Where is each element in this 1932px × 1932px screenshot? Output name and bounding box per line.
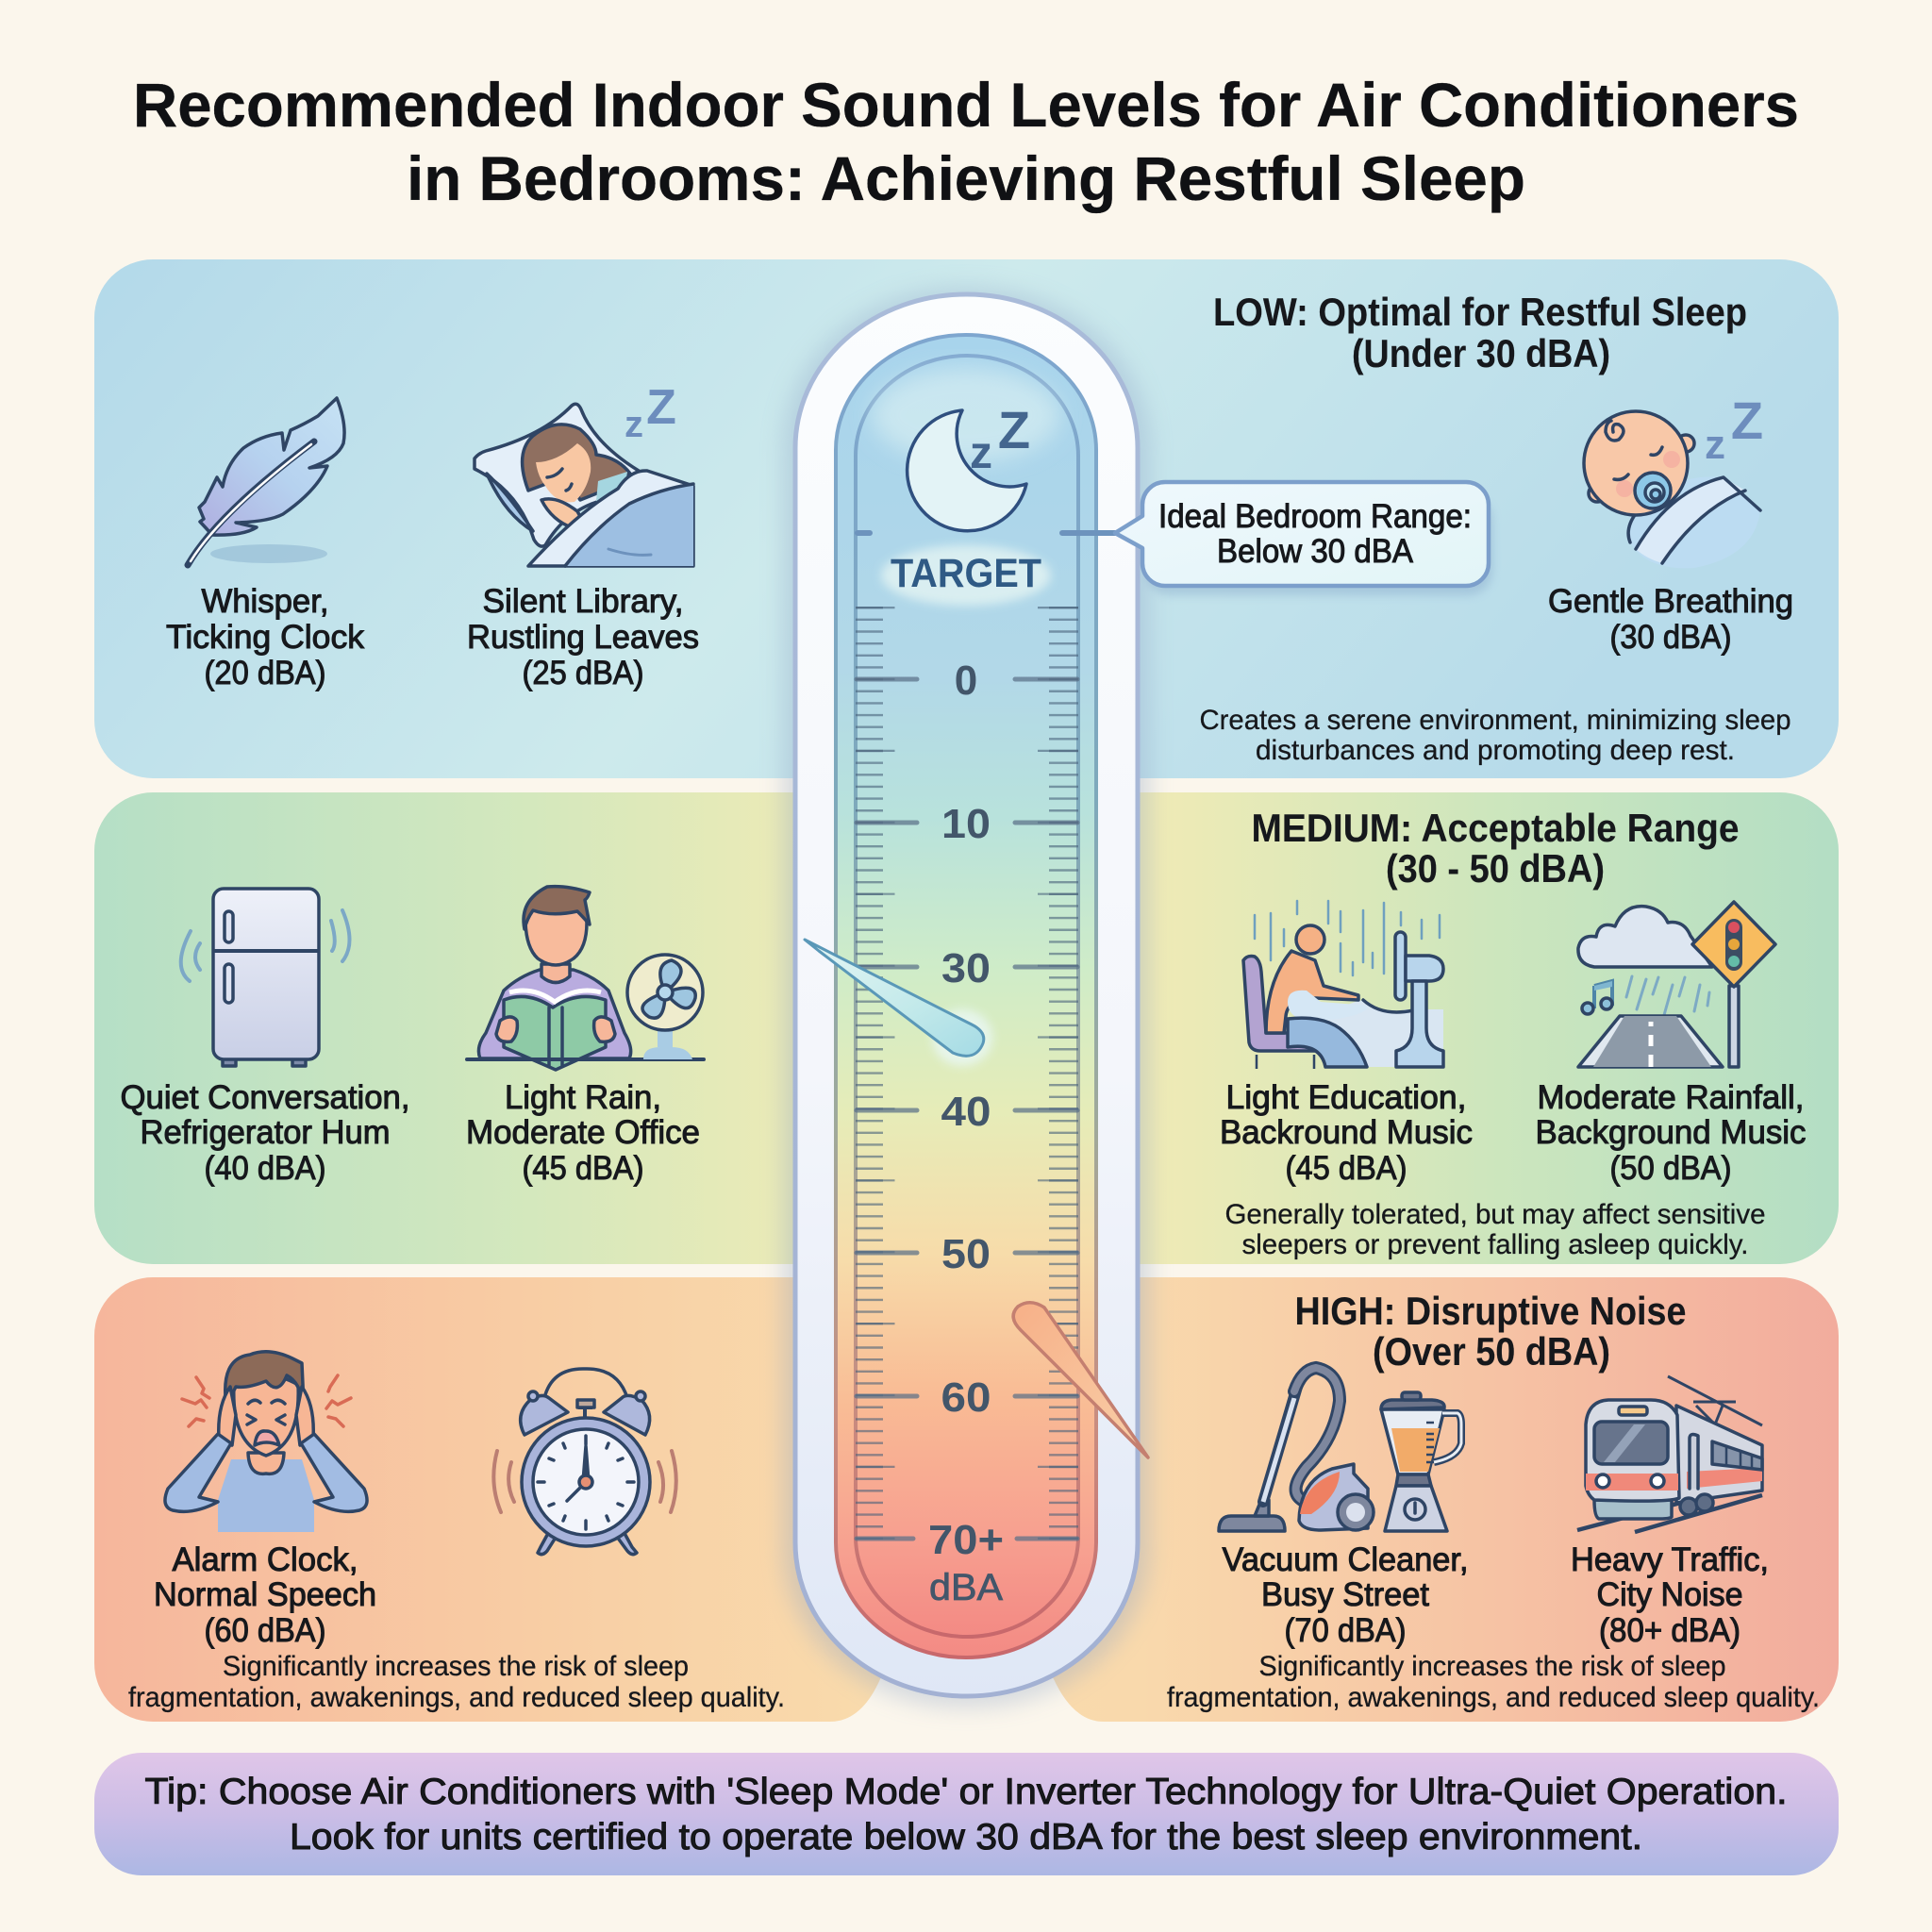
heading: low: (Under 30 dBA) xyxy=(1352,331,1610,375)
label: moderate rainfall xyxy=(1536,1079,1806,1187)
description: low xyxy=(1200,705,1790,766)
heading: medium xyxy=(1251,806,1740,891)
icon: moon with zzz xyxy=(908,400,1030,531)
icon: train xyxy=(1577,1376,1762,1532)
icon: vacuum cleaner and blender xyxy=(1219,1368,1461,1531)
icon: moon with zzz: Z xyxy=(998,400,1030,459)
needle: low indicator xyxy=(805,940,992,1066)
description: medium: sleepers or prevent falling asleep quickly. xyxy=(1241,1229,1749,1260)
heading: high: HIGH: Disruptive Noise xyxy=(1294,1289,1687,1333)
description: high left: Significantly increases the risk of sleep xyxy=(223,1651,689,1682)
description: low: disturbances and promoting deep rest. xyxy=(1256,735,1735,766)
label: gentle breathing: Gentle Breathing xyxy=(1548,583,1793,620)
icon: person covering ears xyxy=(165,1352,367,1532)
label: vacuum cleaner xyxy=(1223,1541,1468,1649)
scale numbers: 0 xyxy=(955,658,977,704)
label: heavy traffic: (80+ dBA) xyxy=(1599,1612,1740,1649)
heading: high: (Over 50 dBA) xyxy=(1373,1329,1610,1374)
label: light education: Light Education, xyxy=(1226,1079,1466,1116)
label: whisper: Whisper, xyxy=(202,583,328,620)
scale numbers: 10 xyxy=(941,801,991,847)
label: moderate rainfall: Moderate Rainfall, xyxy=(1538,1079,1804,1116)
label: silent library xyxy=(467,583,699,691)
icon: person reading with fan xyxy=(467,887,704,1070)
scale numbers: 70+ xyxy=(928,1517,1004,1563)
callout: ideal range: Below 30 dBA xyxy=(1217,533,1414,570)
label: moderate rainfall: Background Music xyxy=(1536,1114,1806,1151)
heading: medium: (30 - 50 dBA) xyxy=(1386,846,1605,891)
scale ticks xyxy=(870,607,1064,1540)
tip text: Look for units certified to operate below 30 dBA for the best sleep environment. xyxy=(290,1817,1642,1857)
label: whisper: Ticking Clock xyxy=(166,619,364,656)
label: light rain xyxy=(466,1079,700,1187)
description: high left xyxy=(128,1651,785,1713)
tip text: Tip: Choose Air Conditioners with 'Sleep Mode' or Inverter Technology for Ultra-Quiet Operation. xyxy=(145,1772,1787,1812)
label: heavy traffic: City Noise xyxy=(1596,1576,1743,1613)
title xyxy=(133,70,1799,213)
label: light education: (45 dBA) xyxy=(1285,1150,1407,1187)
label: heavy traffic xyxy=(1571,1541,1769,1649)
label: target: TARGET xyxy=(891,551,1041,596)
label: gentle breathing xyxy=(1548,583,1793,656)
needle: high indicator xyxy=(1013,1303,1148,1457)
scale numbers xyxy=(928,658,1004,1608)
moon glow xyxy=(872,368,1060,462)
label: vacuum cleaner: Vacuum Cleaner, xyxy=(1223,1541,1468,1578)
heading: low: LOW: Optimal for Restful Sleep xyxy=(1213,290,1747,334)
label: light rain: (45 dBA) xyxy=(523,1150,643,1187)
label: alarm clock: Normal Speech xyxy=(154,1576,376,1613)
icon: sleeping baby: Z xyxy=(1731,391,1763,450)
label: vacuum cleaner: (70 dBA) xyxy=(1285,1612,1406,1649)
callout: ideal range: Ideal Bedroom Range: xyxy=(1158,498,1472,535)
description: high left: fragmentation, awakenings, and reduced sleep quality. xyxy=(128,1682,785,1713)
target glow xyxy=(881,545,1051,606)
scale numbers: 30 xyxy=(941,945,991,991)
heading: low xyxy=(1213,290,1747,375)
icon: refrigerator xyxy=(181,889,349,1066)
icon: feather xyxy=(188,398,344,565)
label: light education xyxy=(1220,1079,1473,1187)
icon: sleeping woman: Z xyxy=(646,380,676,435)
icon: person at desk in rain xyxy=(1243,901,1443,1069)
icon: sleeping baby xyxy=(1584,391,1763,568)
description: medium xyxy=(1224,1199,1766,1260)
icon: alarm clock xyxy=(493,1369,676,1555)
description: medium: Generally tolerated, but may affect sensitive xyxy=(1224,1199,1766,1230)
description: high right xyxy=(1167,1651,1820,1713)
major ticks xyxy=(857,679,1077,1539)
icon: sleeping woman xyxy=(475,380,693,566)
label: silent library: (25 dBA) xyxy=(523,655,643,691)
label: moderate rainfall: (50 dBA) xyxy=(1609,1150,1732,1187)
scale numbers: 60 xyxy=(941,1374,991,1421)
heading: high xyxy=(1294,1289,1687,1374)
label: vacuum cleaner: Busy Street xyxy=(1261,1576,1429,1613)
description: high right: Significantly increases the risk of sleep xyxy=(1258,1651,1726,1682)
label: quiet conversation: (40 dBA) xyxy=(204,1150,326,1187)
thermometer outer casing xyxy=(795,294,1138,1696)
scale numbers: 40 xyxy=(941,1089,991,1135)
label: whisper: (20 dBA) xyxy=(204,655,326,691)
label: light rain: Light Rain, xyxy=(505,1079,661,1116)
icon: moon with zzz: z xyxy=(970,428,992,478)
icon: sleeping baby: z xyxy=(1705,422,1725,468)
panel: low xyxy=(94,259,1839,778)
icon: rain cloud, road and traffic sign xyxy=(1578,902,1775,1067)
label: heavy traffic: Heavy Traffic, xyxy=(1571,1541,1769,1578)
label: alarm clock: (60 dBA) xyxy=(204,1612,326,1649)
description: high right: fragmentation, awakenings, and reduced sleep quality. xyxy=(1167,1682,1820,1713)
label: silent library: Rustling Leaves xyxy=(467,619,699,656)
label: whisper xyxy=(166,583,364,691)
label: alarm clock: Alarm Clock, xyxy=(172,1541,358,1578)
label: gentle breathing: (30 dBA) xyxy=(1609,619,1732,656)
panel: high xyxy=(94,1277,1839,1722)
thermometer tube xyxy=(836,335,1096,1657)
label: silent library: Silent Library, xyxy=(483,583,683,620)
heading: medium: MEDIUM: Acceptable Range xyxy=(1251,806,1740,850)
tip text xyxy=(145,1772,1787,1857)
scale numbers: 50 xyxy=(941,1231,991,1277)
panel: tip xyxy=(94,1753,1839,1875)
thermometer inner scale area xyxy=(856,356,1078,1637)
callout: ideal range xyxy=(1115,482,1492,595)
description: low: Creates a serene environment, minimizing sleep xyxy=(1200,705,1790,736)
panel: medium xyxy=(94,792,1839,1264)
label: quiet conversation: Refrigerator Hum xyxy=(140,1114,391,1151)
label: light rain: Moderate Office xyxy=(466,1114,700,1151)
scale numbers: dBA xyxy=(929,1567,1003,1608)
label: alarm clock xyxy=(154,1541,376,1649)
target tick marks xyxy=(858,530,1115,536)
title: in Bedrooms: Achieving Restful Sleep xyxy=(407,143,1525,213)
label: quiet conversation: Quiet Conversation, xyxy=(121,1079,409,1116)
label: light education: Backround Music xyxy=(1220,1114,1473,1151)
label: quiet conversation xyxy=(121,1079,409,1187)
title: Recommended Indoor Sound Levels for Air Conditioners xyxy=(133,70,1799,140)
icon: sleeping woman: z xyxy=(625,404,643,445)
thermometer xyxy=(783,288,1150,1707)
